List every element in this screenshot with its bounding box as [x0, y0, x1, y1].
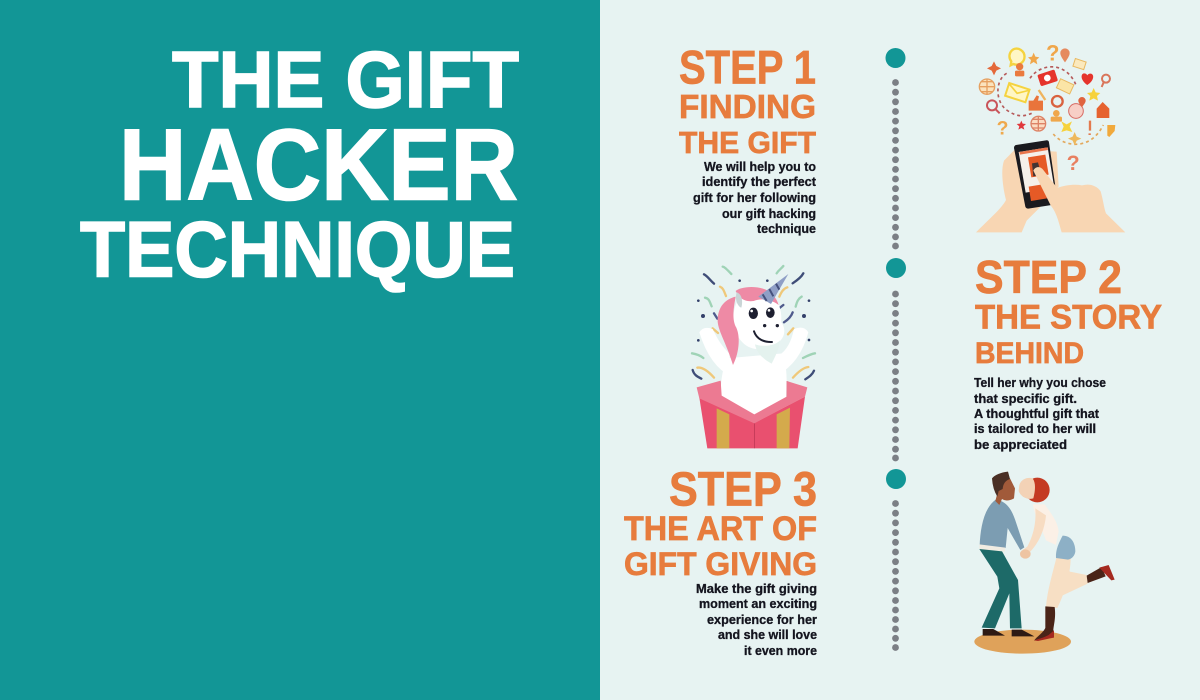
icon: question mark: ? — [1046, 41, 1059, 66]
confetti — [692, 266, 815, 379]
heading: step 3 — [624, 464, 817, 582]
heading: step 3: STEP 3 — [669, 464, 817, 516]
heading: step 2 — [975, 251, 1162, 370]
timeline marker: step 1 — [886, 48, 906, 68]
timeline marker: step 2 — [886, 258, 906, 278]
gift box ribbon — [717, 408, 790, 448]
body: step 2 description: be appreciated — [974, 437, 1067, 452]
heading: step 3: GIFT GIVING — [624, 546, 817, 582]
dotted line: step 2 — [892, 291, 899, 461]
icon: house — [1097, 102, 1109, 118]
icon: compass star bottom — [1068, 132, 1081, 145]
heading: step 2: BEHIND — [975, 337, 1084, 370]
man sweater — [980, 499, 1024, 550]
gift box rim — [697, 381, 807, 423]
body: step 2 description: is tailored to her will — [974, 421, 1096, 436]
dashed swirl paths — [998, 67, 1103, 144]
dotted line: step 1 — [892, 79, 899, 249]
heading: step 2: STEP 2 — [975, 251, 1122, 303]
step 1 text block — [679, 40, 817, 236]
body: step 2 description — [974, 375, 1106, 452]
illustration: couple kissing — [974, 472, 1115, 654]
body: step 2 description: A thoughtful gift that — [974, 406, 1100, 421]
joined hands — [1020, 549, 1031, 559]
title: The Gift Hacker Technique: TECHNIQUE — [80, 204, 515, 294]
icon: map pin ring — [1052, 96, 1063, 107]
icon: person — [1015, 63, 1024, 76]
icon: exclamation — [1086, 121, 1093, 135]
title: The Gift Hacker Technique — [80, 35, 519, 294]
body: step 1 description: gift for her following — [693, 190, 816, 205]
phone screen — [1019, 147, 1054, 193]
unicorn body and arms — [699, 288, 808, 418]
icon: small person — [1051, 110, 1062, 122]
icon: yellow cross star — [1061, 121, 1072, 132]
icon: yellow tag — [1107, 125, 1115, 137]
icon: yellow speech bubble — [1009, 49, 1025, 65]
icon: globe — [979, 79, 995, 94]
woman shorts — [1056, 536, 1075, 560]
unicorn ear — [736, 292, 742, 308]
woman boot — [1034, 606, 1055, 641]
body: step 1 description: our gift hacking — [722, 206, 816, 221]
heading: step 1: THE GIFT — [679, 125, 816, 160]
step 3 text block — [624, 464, 817, 658]
man head — [995, 478, 1015, 505]
woman head — [1025, 478, 1050, 502]
icon: envelope — [1056, 79, 1074, 94]
woman back leg — [1055, 565, 1088, 597]
box back — [702, 381, 803, 398]
heading: step 1: FINDING — [679, 88, 816, 125]
heading: step 3: THE ART OF — [624, 510, 817, 548]
icon: question mark bottom: ? — [1067, 151, 1080, 175]
icon: pink globe with pin — [1069, 97, 1086, 118]
title: The Gift Hacker Technique: THE GIFT — [172, 35, 519, 124]
heading: step 2: THE STORY — [975, 298, 1162, 336]
icon: question mark left: ? — [997, 119, 1008, 140]
body: step 2 description: that specific gift. — [974, 391, 1077, 406]
body: step 3 description: experience for her — [707, 612, 817, 627]
body: step 2 description: Tell her why you chose — [974, 375, 1106, 390]
phone — [1014, 140, 1058, 209]
woman torso and arm — [1033, 504, 1059, 545]
body: step 1 description: technique — [757, 221, 816, 236]
heading: step 1 — [679, 40, 816, 160]
illustration: unicorn in gift box — [692, 266, 815, 448]
icon: heart — [1082, 73, 1093, 85]
hand: left — [976, 149, 1059, 232]
icon: thumb up — [1029, 95, 1043, 111]
icon: star — [1087, 88, 1100, 101]
body: step 1 description — [693, 159, 817, 236]
hand: right pointing — [1033, 167, 1125, 232]
step 2 text block — [974, 251, 1162, 452]
unicorn horn — [758, 274, 788, 304]
icon: orange star — [1028, 53, 1039, 64]
icon: location pin — [1060, 48, 1070, 62]
body: step 3 description: it even more — [744, 643, 817, 658]
ground ellipse — [974, 630, 1071, 654]
icon: compass star — [987, 61, 1001, 75]
illustration: hands holding phone with social icons — [976, 41, 1125, 232]
icon: magnifier left — [987, 100, 1000, 113]
icon: small envelope — [1073, 59, 1086, 70]
icon: red star — [1017, 121, 1026, 130]
unicorn face — [749, 307, 779, 327]
heading: step 1: STEP 1 — [679, 40, 816, 94]
woman front leg — [1046, 557, 1071, 608]
body: step 1 description: We will help you to — [704, 159, 816, 174]
body: step 3 description: Make the gift giving — [696, 581, 817, 596]
man shoes — [983, 629, 1034, 636]
icon: magnifier — [1102, 75, 1110, 87]
icon: pencil — [1039, 90, 1045, 100]
title: The Gift Hacker Technique: HACKER — [119, 110, 518, 222]
body: step 1 description: identify the perfect — [702, 174, 817, 189]
icon: large envelope — [1005, 83, 1030, 102]
dotted line: step 3 — [892, 500, 899, 651]
icon: red camera — [1037, 69, 1058, 86]
man legs — [979, 548, 1022, 628]
body: step 3 description: moment an exciting — [699, 596, 817, 611]
panel: teal title panel — [0, 0, 600, 700]
unicorn mane — [736, 287, 779, 305]
body: step 3 description: and she will love — [718, 627, 817, 642]
timeline marker: step 3 — [886, 469, 906, 489]
gift box front — [699, 397, 805, 448]
body: step 3 description — [696, 581, 817, 658]
icon: globe centre — [1031, 116, 1046, 131]
